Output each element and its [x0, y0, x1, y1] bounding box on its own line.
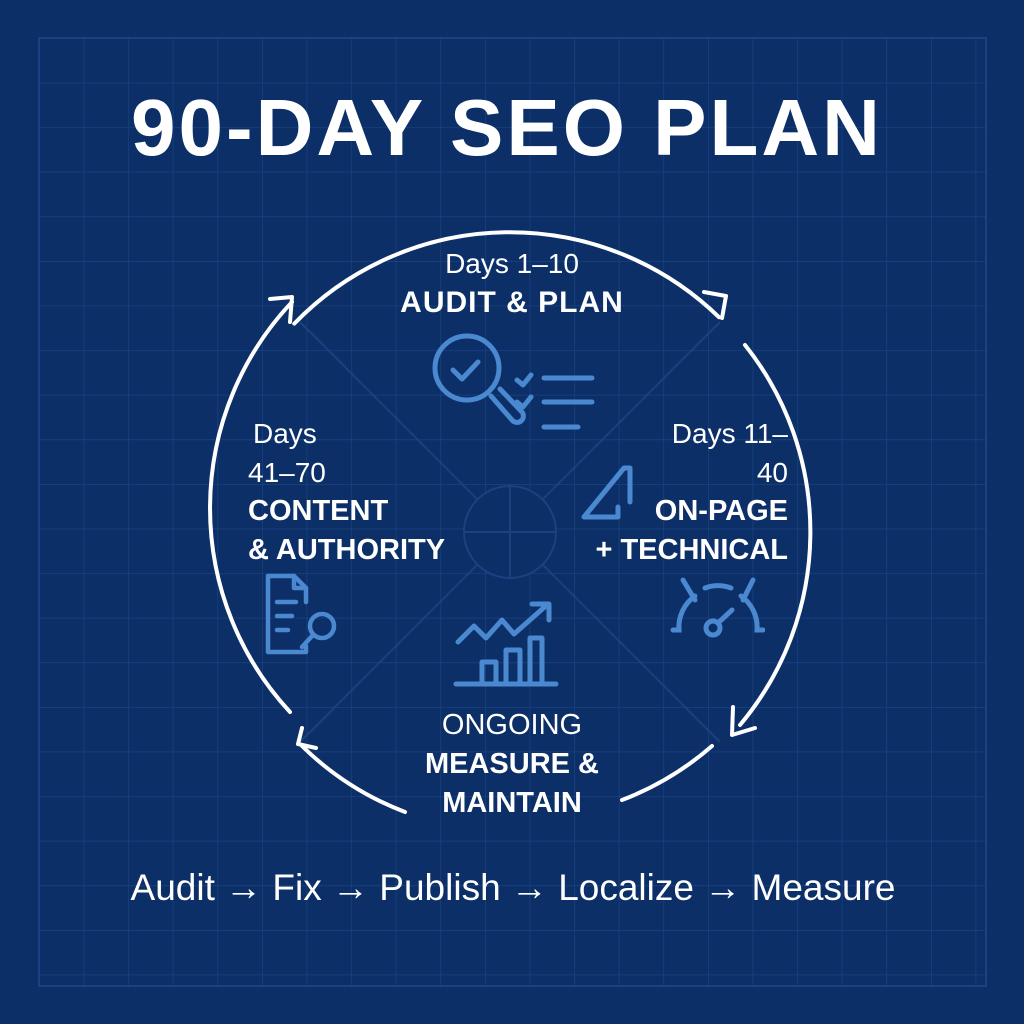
section: on-page technical: ON-PAGE: [655, 495, 788, 527]
section: on-page technical: + TECHNICAL: [595, 534, 788, 566]
title: 90-DAY SEO PLAN: [131, 83, 883, 172]
section: measure & maintain: [425, 709, 599, 819]
icon: document search: [266, 574, 336, 654]
section: content & authority: [248, 418, 445, 566]
icon: speedometer: [670, 578, 765, 638]
section: audit & plan: Days 1–10: [445, 248, 579, 279]
section: measure & maintain: ONGOING: [442, 709, 582, 741]
icon: magnifier checklist: [432, 334, 594, 430]
bottom right: [622, 746, 712, 800]
footer workflow text: Audit → Fix → Publish → Localize → Measure: [131, 867, 895, 908]
section: content & authority: 41–70: [248, 457, 326, 488]
top arc: [294, 232, 719, 324]
right arc: [740, 345, 810, 725]
section: audit & plan: AUDIT & PLAN: [400, 286, 624, 319]
icon: triangle ruler: [582, 466, 632, 520]
section: content & authority: Days: [253, 418, 317, 449]
section: on-page technical: [595, 418, 788, 566]
section: content & authority: CONTENT: [248, 495, 388, 527]
bottom left: [302, 746, 405, 812]
section: content & authority: & AUTHORITY: [248, 534, 445, 566]
section: measure & maintain: MEASURE &: [425, 748, 599, 780]
icon: growth chart: [454, 602, 558, 686]
section: measure & maintain: MAINTAIN: [442, 787, 582, 819]
left arc: [210, 302, 292, 712]
section: on-page technical: 40: [757, 457, 788, 488]
section: on-page technical: Days 11–: [672, 418, 788, 449]
section: audit & plan: [400, 248, 624, 319]
